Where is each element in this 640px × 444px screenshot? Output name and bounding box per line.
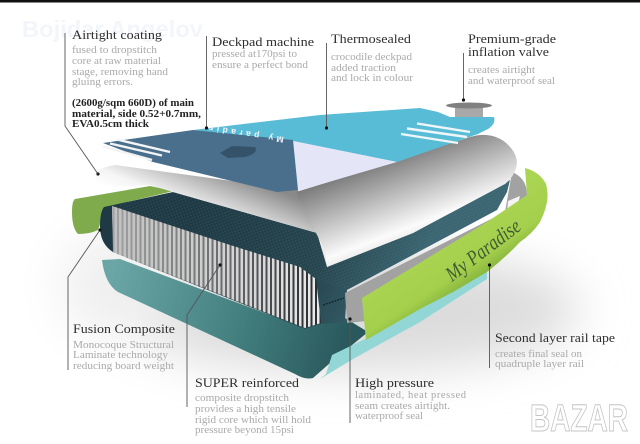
callout: second layer rail tape: creates final seal on — [495, 349, 583, 360]
callout: high pressure: seam creates airtight. — [355, 401, 450, 412]
callout: inflation valve: and waterproof seal — [468, 76, 555, 87]
callout: deckpad machine: ensure a perfect bond — [212, 60, 309, 71]
paddle board exploded diagram — [72, 102, 548, 379]
callout: thermosealed: Thermosealed — [331, 31, 412, 46]
callout: thermosealed: added traction — [331, 63, 397, 74]
callout: airtight coating: EVA0.5cm thick — [72, 119, 149, 130]
deck cyan panel — [193, 108, 494, 162]
callout: airtight coating: material, side 0.52+0.7mm, — [72, 109, 201, 120]
green left rail end — [72, 186, 174, 234]
deck stripes left — [103, 140, 170, 160]
callout: second layer rail tape: Second layer rail tape — [495, 330, 615, 345]
callout: inflation valve: inflation valve — [468, 44, 549, 59]
upside-down deck logo: My paradise — [200, 122, 284, 145]
soft floor shadow — [60, 230, 580, 372]
deck handle — [220, 146, 256, 158]
callout: second layer rail tape — [488, 263, 615, 370]
callout: deckpad machine — [205, 34, 314, 130]
silver sheet top layer — [95, 165, 320, 237]
callout: airtight coating: stage, removing hand — [72, 67, 169, 78]
callout: deckpad machine: pressed at170psi to — [212, 49, 297, 60]
callout: thermosealed: and lock in colour — [331, 73, 414, 84]
callout: airtight coating — [65, 27, 201, 176]
top black bar — [0, 0, 640, 2]
callout: inflation valve — [462, 31, 556, 102]
callout: airtight coating: (2600g/sqm 660D) of main — [72, 98, 194, 109]
callout: thermosealed — [325, 31, 414, 130]
deck stripes right — [401, 124, 470, 143]
callout: fusion composite — [68, 228, 175, 372]
callout: fusion composite: Fusion Composite — [73, 321, 175, 336]
callout: inflation valve: Premium-grade — [468, 31, 556, 46]
callout: super reinforced: pressure beyond 15psi — [195, 425, 294, 436]
knit core — [100, 180, 510, 329]
brand script on green rail: My Paradise — [440, 214, 525, 286]
callout: super reinforced: composite dropstitch — [195, 393, 290, 404]
callout: airtight coating: Airtight coating — [72, 27, 163, 42]
lavender deck panel — [293, 141, 397, 191]
callout: super reinforced: rigid core which will hold — [195, 415, 312, 426]
silver rail — [296, 135, 517, 267]
slate deck panel — [103, 130, 298, 192]
callout: super reinforced: provides a high tensile — [195, 404, 296, 415]
callout: high pressure: laminated, heat pressed — [355, 390, 467, 401]
seam stitching — [323, 298, 344, 305]
light teal bottom rail — [320, 271, 487, 379]
callout: high pressure: waterproof seal — [355, 411, 423, 422]
inner grey rail tape — [345, 172, 527, 323]
callout: fusion composite: Laminate technology — [73, 350, 169, 361]
knit texture — [110, 180, 510, 290]
bottom teal layer — [102, 259, 368, 378]
callout: thermosealed: crocodile deckpad — [331, 52, 413, 63]
valve — [446, 102, 492, 117]
callout: super reinforced: SUPER reinforced — [195, 375, 300, 390]
white gap at rail end — [507, 196, 520, 211]
dropstitch core fibres — [112, 206, 321, 328]
callout: high pressure — [348, 317, 467, 423]
callout: airtight coating: gluing errors. — [72, 77, 133, 88]
callout: deckpad machine: Deckpad machine — [212, 34, 314, 49]
callout: fusion composite: Monocoque Structural — [73, 340, 174, 351]
callout: inflation valve: creates airtight — [468, 65, 535, 76]
callout: airtight coating: core at raw material — [72, 56, 161, 67]
callout: high pressure: High pressure — [355, 375, 434, 390]
callout: fusion composite: reducing board weight — [73, 361, 174, 372]
callout: second layer rail tape: quadruple layer rail — [495, 359, 584, 370]
callout: super reinforced — [187, 263, 312, 436]
callout: airtight coating: fused to dropstitch — [72, 45, 158, 56]
green outer rail — [362, 168, 548, 340]
watermark: author name: Bojidar Angelov — [22, 16, 203, 42]
